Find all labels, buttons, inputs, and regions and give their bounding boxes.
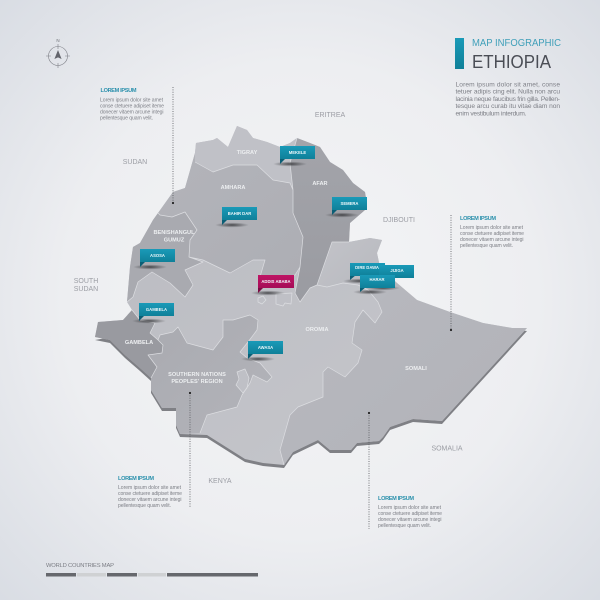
pin: Asosa — [133, 249, 175, 270]
country labels: SUDAN — [123, 159, 147, 166]
pin: Addis Ababa: ADDIS ABABA — [261, 279, 291, 284]
region: Sidama enclave — [236, 369, 249, 393]
pin: Addis Ababa — [251, 275, 294, 296]
callout: bottom left: pellentesque quam velit. — [118, 503, 171, 509]
country labels: DJIBOUTI — [383, 217, 415, 224]
pin: Harar — [353, 275, 395, 294]
country labels: ERITREA — [315, 112, 345, 119]
callout: top left: conse ctetuere adipiset iteme — [100, 104, 164, 110]
pin: Mekele: MEKELE — [289, 150, 306, 155]
callout: right: donecer vitaem arcune integi — [460, 237, 524, 243]
region labels: AMHARA — [221, 185, 245, 191]
callout: bottom right — [368, 412, 442, 529]
region labels: SOMALI — [405, 366, 427, 372]
country labels: SUDAN — [74, 286, 98, 293]
callout: top left: donecer vitaem arcune integi — [100, 110, 164, 116]
region: Addis enclaves — [258, 293, 292, 306]
intro text: tetuer adipis cing elit. Nulla non arcu — [456, 89, 560, 96]
pin: Gambela: GAMBELA — [146, 307, 167, 312]
region: Southern Nations — [148, 315, 272, 434]
callout: bottom left: LOREM IPSUM — [118, 476, 154, 482]
region: Oromia — [95, 126, 527, 465]
intro text: Lorem ipsum dolor sit amet, conse — [456, 82, 560, 88]
callout: top left: Lorem ipsum dolor site amet — [100, 98, 164, 104]
map: Ethiopia — [95, 126, 527, 468]
region: Amhara — [158, 153, 303, 278]
region labels: BENISHANGUL — [153, 230, 195, 236]
icon: compass: N — [56, 38, 60, 43]
region labels: PEOPLES' REGION — [171, 379, 223, 385]
region: Afar — [290, 138, 366, 302]
icon: compass — [46, 38, 70, 68]
region labels: OROMIA — [306, 327, 328, 333]
region: Tigray — [195, 126, 297, 190]
intro text: tesque arcu curab itu vitae diam non — [456, 103, 560, 110]
country labels — [74, 112, 463, 485]
region labels: TIGRAY — [237, 150, 258, 156]
country labels: SOUTH — [74, 278, 98, 285]
title: Ethiopia: ETHIOPIA — [472, 52, 551, 72]
callout: right: conse ctetuere adipiset iteme — [460, 231, 524, 237]
pin: Dire Dawa — [343, 263, 385, 284]
callout: bottom right: Lorem ipsum dolor site amet — [378, 505, 442, 511]
callout: bottom left: conse ctetuere adipiset iteme — [118, 491, 182, 497]
country labels: KENYA — [208, 478, 232, 485]
pin: Semera: SEMERA — [341, 201, 358, 206]
pin: Harar: HARAR — [369, 277, 385, 282]
callout: bottom left — [118, 392, 191, 509]
region labels: SOUTHERN NATIONS — [168, 372, 226, 378]
pin: Mekele — [273, 146, 315, 166]
pin: Bahir Dar — [215, 207, 257, 228]
region: Somali — [280, 238, 527, 465]
intro text — [456, 82, 560, 117]
pin: Semera — [325, 197, 367, 218]
callout: right: Lorem ipsum dolor site amet — [460, 225, 524, 231]
callout: bottom right: donecer vitaem arcune integi — [378, 517, 442, 523]
pin: Jijiga — [366, 265, 414, 290]
region labels: AFAR — [312, 181, 328, 187]
region borders — [127, 138, 382, 465]
footer scale bar — [46, 573, 258, 576]
region labels — [125, 150, 427, 385]
pin: Jijiga: JIJIGA — [390, 268, 404, 273]
region: Benishangul-Gumuz — [127, 212, 203, 302]
callout: top left: pellentesque quam velit. — [100, 116, 153, 122]
header bar — [455, 38, 464, 69]
callout: bottom right: LOREM IPSUM — [378, 496, 414, 502]
pin: Dire Dawa: DIRE DAWA — [355, 265, 379, 270]
region: Gambela — [95, 310, 163, 378]
pin: Awasa — [241, 341, 283, 362]
pin: Asosa: ASOSA — [150, 253, 165, 258]
pin: Awasa: AWASA — [258, 345, 273, 350]
region labels: GUMUZ — [164, 238, 185, 244]
callout: right: LOREM IPSUM — [460, 216, 496, 222]
title: map infographic: MAP INFOGRAPHIC — [472, 37, 561, 49]
callout: bottom right: conse ctetuere adipiset iteme — [378, 511, 442, 517]
callout: bottom right: pellentesque quam velit. — [378, 523, 431, 529]
region labels: GAMBELA — [125, 340, 153, 346]
pin: Gambela — [132, 303, 174, 324]
intro text: lacinia neque faucibus frin gilla. Pellen- — [456, 96, 560, 103]
callout: right: pellentesque quam velit. — [460, 243, 513, 249]
callout: top left — [100, 87, 174, 204]
callout: right — [450, 215, 524, 331]
pin: Bahir Dar: BAHIR DAR — [228, 211, 251, 216]
intro text: enim vestibulum interdum. — [456, 110, 527, 117]
callout: bottom left: donecer vitaem arcune integi — [118, 497, 182, 503]
callout: top left: LOREM IPSUM — [100, 88, 137, 94]
map extrusion edge — [95, 303, 527, 468]
country labels: SOMALIA — [431, 446, 463, 452]
callout: bottom left: Lorem ipsum dolor site amet — [118, 485, 182, 491]
footer label: WORLD COUNTRIES MAP — [46, 563, 114, 569]
